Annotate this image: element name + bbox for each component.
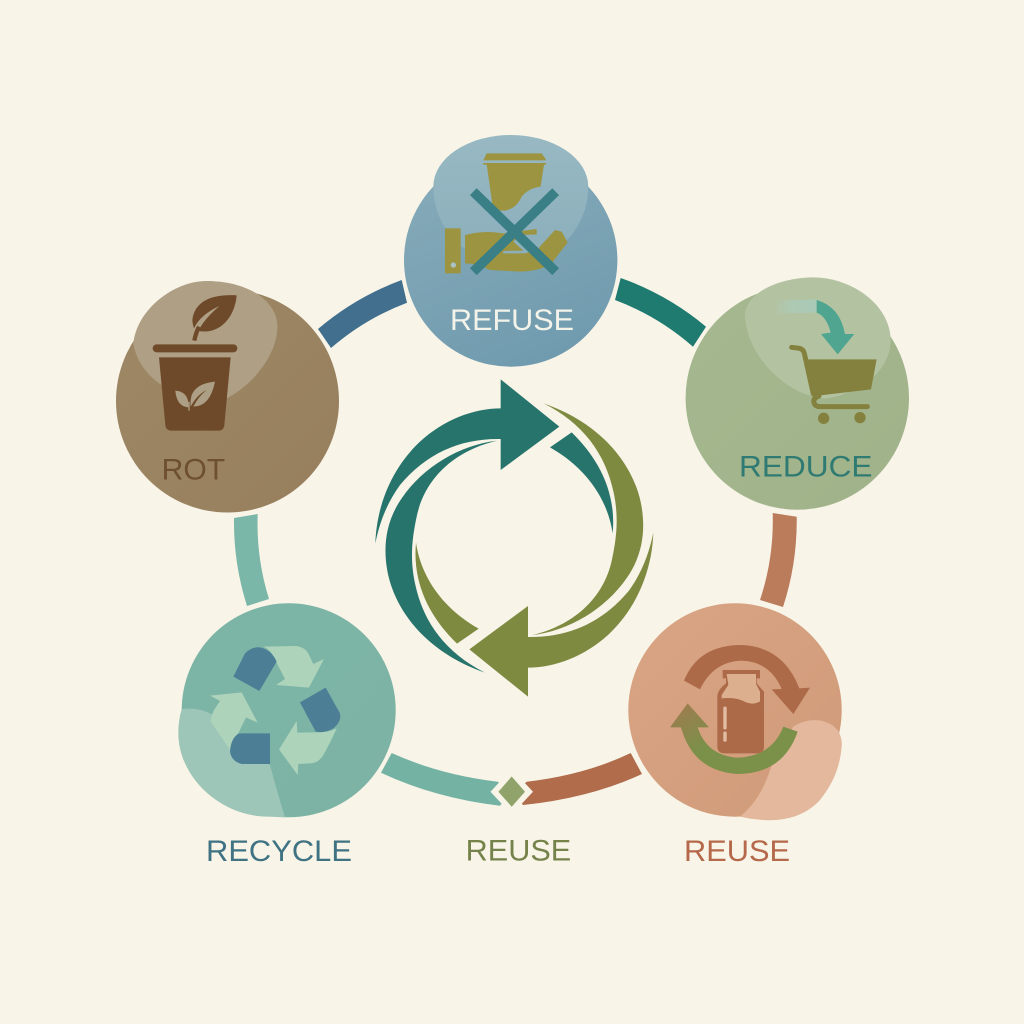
icon: recycle arrows	[178, 646, 340, 817]
icon: shopping cart with arrow	[745, 277, 891, 424]
diamond connector	[490, 769, 533, 814]
rot label: ROT	[162, 453, 225, 486]
refuse label: REFUSE	[450, 304, 574, 337]
icon: compost cup with leaf	[133, 281, 277, 431]
refuse highlight	[433, 135, 588, 264]
teal arrow	[375, 379, 613, 673]
refuse circle	[404, 153, 617, 367]
icon: jar with circular arrows	[670, 645, 842, 820]
ring segment: reduce to reuse	[760, 513, 797, 607]
olive arrow	[415, 403, 653, 697]
reduce circle	[686, 286, 909, 510]
icon: refused cup and hand	[445, 153, 568, 273]
ring segment: diamond to reuse	[514, 753, 642, 805]
ring segment: rot to refuse	[318, 280, 407, 348]
right reuse label: REUSE	[684, 835, 790, 868]
panel: refuse	[404, 135, 617, 367]
ring segment: recycle to diamond	[381, 753, 510, 806]
panel: recycle	[178, 603, 396, 817]
panel: rot	[116, 281, 339, 512]
panel: reuse	[628, 603, 842, 820]
rot circle	[116, 290, 339, 512]
reuse circle	[628, 603, 842, 817]
ring segment: recycle to rot	[234, 514, 269, 606]
panel: reduce	[686, 277, 909, 510]
recycle circle	[182, 603, 396, 817]
centre reuse label: REUSE	[466, 835, 571, 868]
ring segment: refuse to reduce	[615, 278, 706, 347]
recycle label: RECYCLE	[206, 835, 352, 868]
reduce label: REDUCE	[739, 451, 872, 484]
central cycle arrows	[375, 379, 653, 697]
